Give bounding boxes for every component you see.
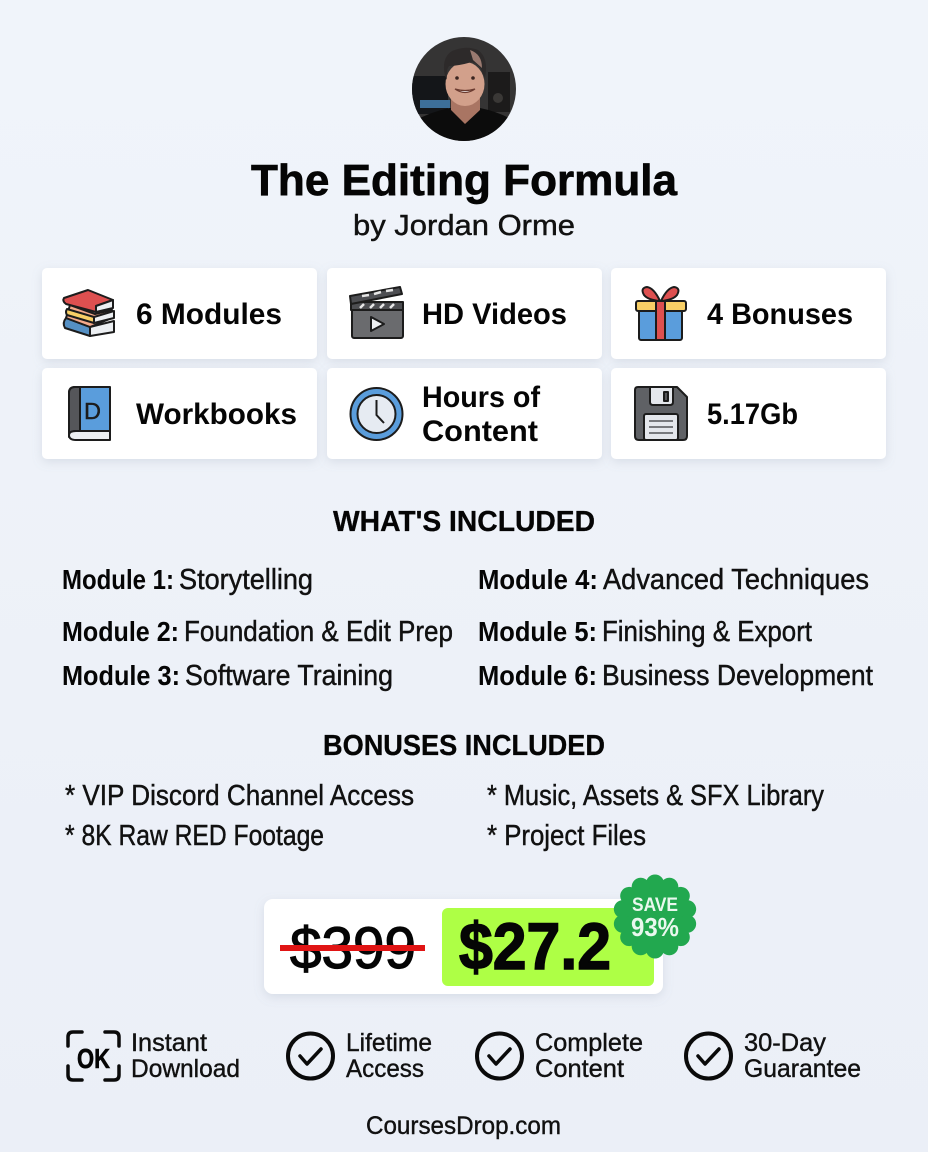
Module 3: Module 3: xyxy=(62,660,180,691)
footer: site name: CoursesDrop.com xyxy=(366,1112,561,1140)
feature: Complete Content xyxy=(477,1029,643,1083)
heading: What's Included: WHAT'S INCLUDED xyxy=(333,506,595,538)
Module 6: Business Development xyxy=(602,660,873,692)
bonus list: * Music, Assets & SFX Library xyxy=(487,780,824,812)
icon: clapperboard xyxy=(350,287,403,338)
icon: OK scan frame xyxy=(68,1032,119,1080)
icon: OK scan frame: OK xyxy=(77,1043,110,1074)
feature: Complete Content: Content xyxy=(535,1055,624,1083)
subtitle: author: by Jordan Orme xyxy=(353,210,575,242)
label: Hours of Content: Content xyxy=(422,415,538,448)
label: Workbooks: Workbooks xyxy=(136,398,297,431)
label: Hours of Content xyxy=(422,381,541,448)
icon: clock xyxy=(350,388,402,440)
feature: Lifetime Access xyxy=(288,1029,432,1083)
Module 4: Module 4: xyxy=(478,564,598,595)
feature: Instant Download: Instant xyxy=(131,1029,207,1057)
panel: HD Videos xyxy=(327,268,602,359)
panel: 5.17Gb xyxy=(611,368,886,459)
Module 3 xyxy=(62,660,393,692)
new price: $27.2 xyxy=(459,909,611,983)
badge: save 93% xyxy=(612,874,698,958)
Module 4: Advanced Techniques xyxy=(603,564,869,596)
label: Hours of Content: Hours of xyxy=(422,381,541,414)
bonus list xyxy=(65,780,824,852)
Module 1: Storytelling xyxy=(179,564,313,596)
Module 3: Software Training xyxy=(185,660,393,692)
Module 2: Foundation & Edit Prep xyxy=(184,616,453,648)
feature: Lifetime Access: Lifetime xyxy=(346,1029,432,1057)
Module 1: Module 1: xyxy=(62,564,174,595)
feature: 30-Day Guarantee xyxy=(686,1029,861,1083)
icon letter: D: D xyxy=(84,398,101,424)
feature: 30-Day Guarantee: Guarantee xyxy=(744,1055,861,1083)
feature: Instant Download xyxy=(68,1029,240,1083)
panel: 6 Modules xyxy=(42,268,317,359)
badge: save 93%: SAVE xyxy=(632,894,678,916)
title: The Editing Formula xyxy=(251,156,678,205)
label: 4 Bonuses: 4 Bonuses xyxy=(707,298,853,331)
label: 6 Modules: 6 Modules xyxy=(136,298,282,331)
icon: gift box xyxy=(636,287,686,340)
label: 5.17Gb: 5.17Gb xyxy=(707,398,798,431)
feature: Instant Download: Download xyxy=(131,1055,240,1083)
bonus list: * VIP Discord Channel Access xyxy=(65,780,414,812)
Module 5: Finishing & Export xyxy=(602,616,812,648)
strikethrough xyxy=(280,945,425,951)
Module 2 xyxy=(62,616,453,648)
module list xyxy=(62,564,873,692)
old price: $399 xyxy=(290,916,416,981)
avatar: instructor portrait xyxy=(412,37,516,141)
panel: Workbooks xyxy=(42,368,317,459)
panel: Hours of Content xyxy=(327,368,602,459)
Module 5 xyxy=(478,616,812,648)
icon: floppy disk xyxy=(635,387,687,440)
Module 2: Module 2: xyxy=(62,616,179,647)
panel: price xyxy=(264,874,698,994)
feature: Lifetime Access: Access xyxy=(346,1055,424,1083)
icon: workbook xyxy=(69,387,110,440)
bonus list: * 8K Raw RED Footage xyxy=(65,820,324,852)
new price highlight xyxy=(442,908,654,986)
Module 1 xyxy=(62,564,313,596)
Module 5: Module 5: xyxy=(478,616,597,647)
badge: save 93%: 93% xyxy=(631,912,679,942)
Module 6 xyxy=(478,660,873,692)
feature: 30-Day Guarantee: 30-Day xyxy=(744,1029,827,1057)
feature: Complete Content: Complete xyxy=(535,1029,643,1057)
heading: Bonuses Included: BONUSES INCLUDED xyxy=(323,730,605,762)
Module 4 xyxy=(478,564,869,596)
Module 6: Module 6: xyxy=(478,660,597,691)
panel: 4 Bonuses xyxy=(611,268,886,359)
bonus list: * Project Files xyxy=(487,820,646,852)
icon: check circle xyxy=(686,1034,731,1078)
label: HD Videos: HD Videos xyxy=(422,298,567,331)
icon: stack of books xyxy=(63,290,114,336)
icon: check circle xyxy=(477,1034,522,1078)
icon: check circle xyxy=(288,1034,333,1078)
